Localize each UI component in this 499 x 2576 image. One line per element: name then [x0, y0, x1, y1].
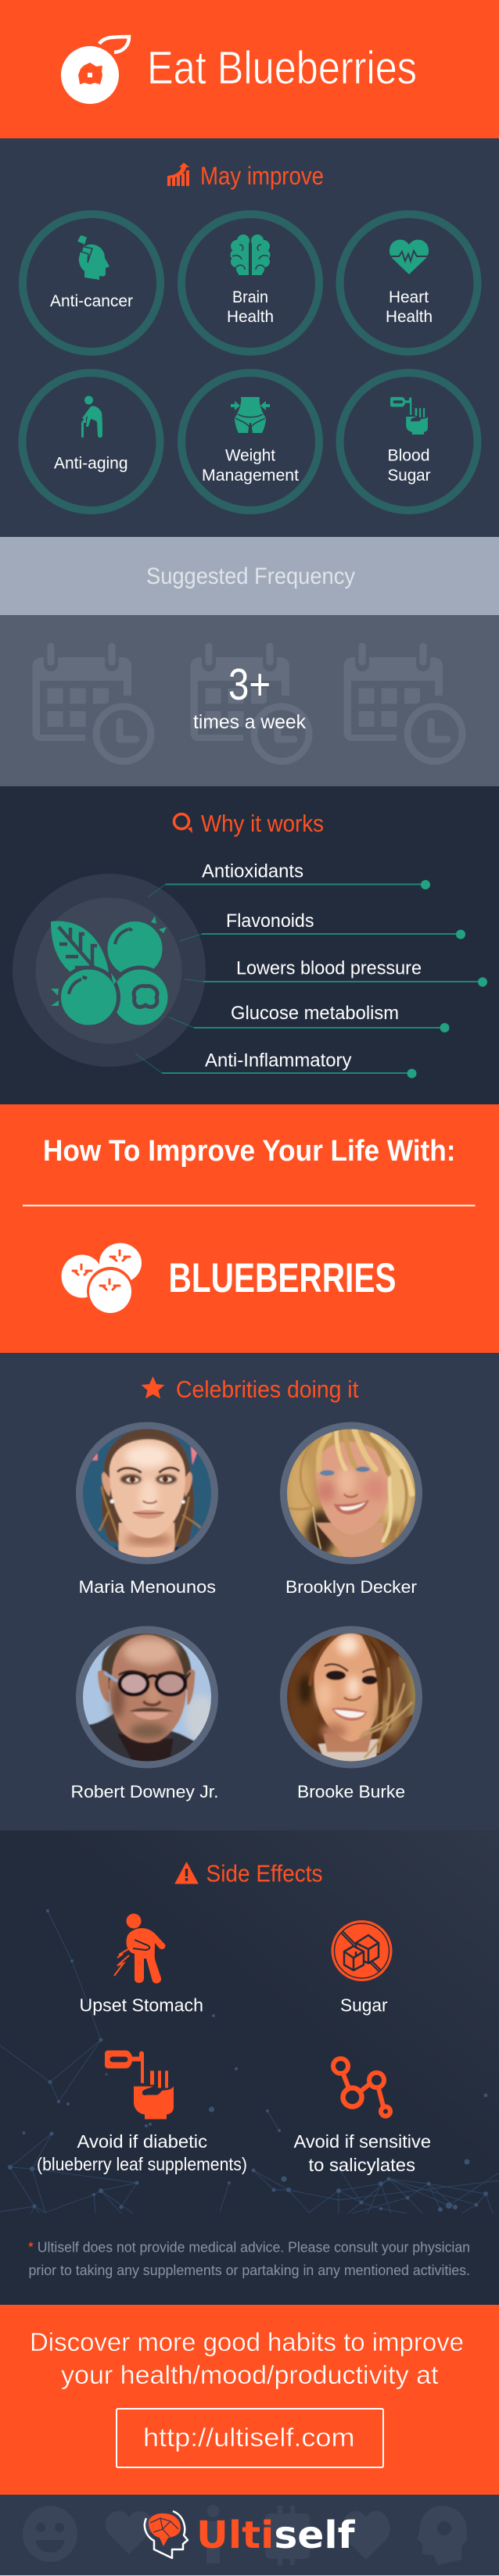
label: to salicylates: to salicylates [308, 2155, 415, 2175]
heading: Celebrities doing it: Celebrities doing it [176, 1376, 359, 1403]
panel: header [0, 0, 499, 138]
icon: glucose meter [390, 397, 428, 435]
diagram: berries in circles [13, 874, 206, 1067]
label: Management [202, 467, 299, 485]
benefit: Anti-aging [22, 373, 160, 510]
portrait ring [80, 1630, 214, 1765]
label: Lowers blood pressure: Lowers blood pressure [236, 958, 422, 979]
icon: elderly person [81, 395, 102, 438]
benefit: Anti-cancer [23, 214, 160, 352]
icon: calendar left [32, 645, 159, 769]
label: Upset Stomach: Upset Stomach [80, 1995, 203, 2015]
logo: Ultiself [145, 2511, 356, 2558]
icon: heart with pulse [390, 240, 429, 274]
url box: http://ultiself.com [143, 2423, 355, 2452]
portrait: Robert Downey Jr. [83, 1633, 211, 1762]
name: Brooklyn Decker: Brooklyn Decker [285, 1577, 417, 1597]
heading: Why it works: Why it works [201, 810, 324, 837]
portrait: Brooke Burke [287, 1633, 415, 1762]
text: discover more: Discover more good habits to improve [30, 2327, 464, 2356]
heading: Suggested Frequency: Suggested Frequency [146, 564, 355, 589]
icon: warning triangle [175, 1862, 198, 1884]
logo brain [149, 2513, 181, 2546]
label: Sugar [388, 467, 430, 485]
divider [23, 1205, 476, 1207]
portrait ring [283, 1426, 419, 1561]
benefit: Brain Health [181, 214, 319, 352]
panel: footer [0, 2495, 499, 2576]
icon: leaf and berries [51, 916, 170, 1027]
name: Brooke Burke: Brooke Burke [297, 1782, 405, 1801]
icon: glucose meter warning [105, 2051, 174, 2120]
portrait: Brooklyn Decker [287, 1429, 415, 1557]
icon: rising chart [167, 163, 189, 186]
title: Eat Blueberries [147, 42, 417, 94]
panel: may improve [0, 138, 499, 537]
logo head outline [145, 2511, 188, 2558]
icon: blueberry logo [61, 37, 129, 104]
portrait ring [283, 1630, 419, 1765]
label: Brain [232, 288, 268, 306]
label: Heart [389, 288, 429, 306]
portrait: Maria Menounos [83, 1429, 211, 1557]
caption: times a week: times a week [193, 711, 306, 733]
value: 3+: 3+ [228, 660, 271, 710]
panel: suggested frequency heading [0, 537, 499, 615]
label: Weight [225, 447, 275, 464]
benefit: Weight Management [181, 373, 319, 510]
label: Anti-Inflammatory: Anti-Inflammatory [205, 1050, 352, 1071]
text: health mood productivity: your health/mood/productivity at [61, 2360, 438, 2389]
faint background icons [23, 2505, 467, 2565]
label: Health [386, 308, 433, 326]
label: Glucose metabolism: Glucose metabolism [231, 1003, 399, 1024]
label: Sugar: Sugar [340, 1995, 388, 2015]
label: blueberry leaf supplements: (blueberry leaf supplements) [37, 2154, 247, 2174]
icon: waist with arrows [231, 397, 270, 433]
panel: how to improve [0, 1104, 499, 1353]
heading: May improve: May improve [200, 162, 324, 190]
panel: call to action [0, 2305, 499, 2495]
icon: calendar centre [190, 645, 317, 769]
logo word: Ultiself [196, 2513, 356, 2557]
label: Anti-cancer [50, 292, 133, 310]
label: Health [227, 308, 274, 326]
label: Avoid if sensitive: Avoid if sensitive [294, 2131, 431, 2152]
disclaimer: * Ultiself does not provide medical advice. Please consult your physician [28, 2238, 470, 2256]
url box [117, 2409, 383, 2467]
callout lines and dots [135, 880, 487, 1079]
label: Anti-aging [54, 455, 128, 472]
label: Avoid if diabetic: Avoid if diabetic [77, 2131, 207, 2152]
icon: brain [230, 234, 271, 275]
icon: upset stomach person [114, 1913, 165, 1984]
panel: frequency value [0, 615, 499, 786]
benefit: Heart Health [339, 214, 477, 352]
heading: Side Effects: Side Effects [206, 1860, 322, 1887]
icon: no sugar [332, 1920, 393, 1981]
icon: magnifier [174, 814, 192, 833]
icon: star [141, 1376, 164, 1399]
benefit: Blood Sugar [339, 373, 477, 510]
panel: why it works [0, 786, 499, 1104]
icon: three blueberries [61, 1243, 142, 1315]
label: Antioxidants: Antioxidants [202, 861, 303, 882]
panel: side effects [0, 1830, 499, 2305]
disclaimer: prior to taking any supplements or partaking in any mentioned activities. [28, 2262, 470, 2278]
panel: celebrities [0, 1353, 499, 1830]
heading: How To Improve Your Life With: How To Improve Your Life With: [43, 1135, 455, 1168]
icon: head with lightning [77, 234, 109, 280]
label: Blood [388, 447, 430, 464]
icon: calendar right [344, 645, 470, 769]
label: Flavonoids: Flavonoids [226, 911, 314, 932]
heading: BLUEBERRIES: BLUEBERRIES [169, 1255, 396, 1301]
portrait ring [80, 1426, 214, 1561]
disclaimer [28, 2238, 470, 2278]
name: Robert Downey Jr.: Robert Downey Jr. [70, 1782, 219, 1801]
icon: salicylate molecule [333, 2059, 390, 2116]
name: Maria Menounos: Maria Menounos [78, 1577, 216, 1597]
